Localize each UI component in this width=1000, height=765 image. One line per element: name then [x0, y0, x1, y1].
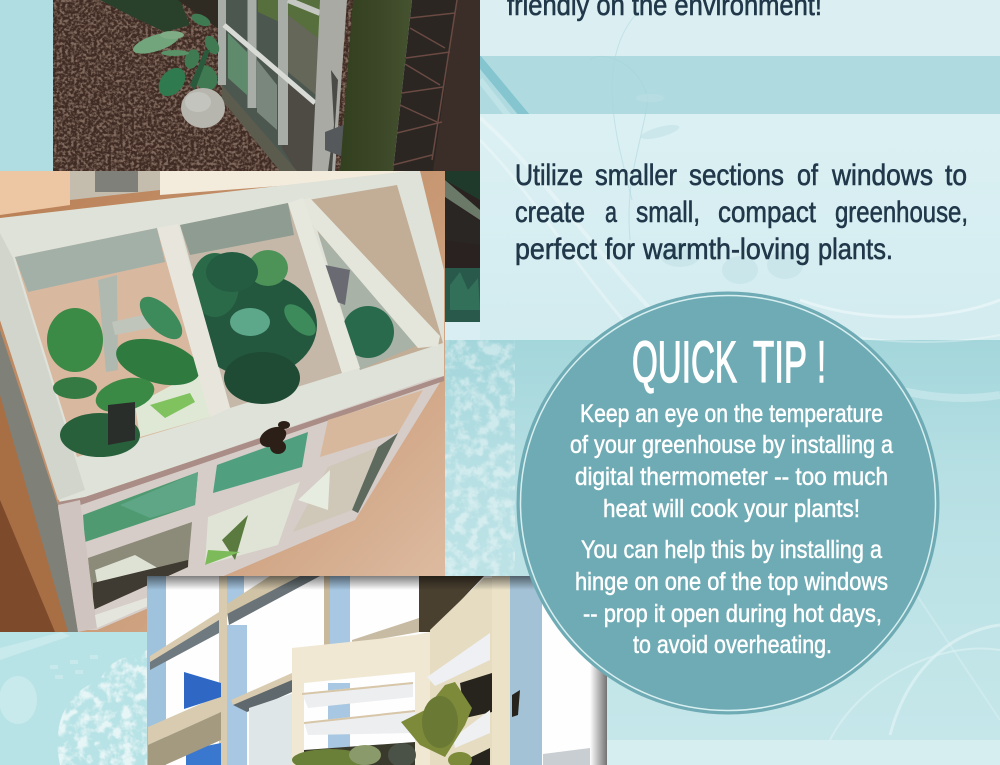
left side of greenhouse [0, 330, 78, 632]
pane left [15, 228, 210, 457]
decorative streaks [480, 10, 1000, 740]
bottom light panel [607, 740, 1000, 765]
leaves [47, 290, 205, 457]
stone [181, 88, 225, 128]
text: utilize smaller sections: Utilize [515, 159, 583, 192]
text: utilize smaller sections: of [797, 159, 819, 192]
callout body text: of your greenhouse by installing a [570, 431, 893, 459]
photo: garden window greenhouse [53, 0, 480, 171]
text: utilize smaller sections: warmth-loving [642, 233, 810, 266]
front frame [58, 376, 444, 630]
text: utilize smaller sections: a [605, 196, 617, 229]
callout body text: digital thermometer -- too much [575, 463, 888, 491]
roof frame [0, 171, 444, 503]
callout body text: hinge on one of the top windows [575, 568, 888, 596]
callout heading: ! [817, 330, 826, 395]
callout body text: to avoid overheating. [633, 631, 832, 659]
hosta plant [133, 14, 220, 96]
photo: strip behind terrarium [445, 171, 480, 322]
text: utilize smaller sections: create [515, 196, 585, 229]
photo: indoor vertical garden greenhouse [147, 576, 607, 765]
photo vignette [147, 576, 534, 589]
soil [53, 0, 353, 171]
planter unit [292, 576, 520, 765]
text: utilize smaller sections [515, 159, 968, 266]
callout: quick tip circle [516, 292, 940, 714]
text: utilize smaller sections: for [605, 233, 635, 266]
front panes [83, 390, 423, 610]
callout heading: QUICK [632, 330, 737, 395]
outdoor view [148, 672, 294, 765]
lower left post [58, 500, 97, 632]
dark wall [419, 576, 484, 632]
window greenhouse [220, 0, 347, 171]
callout body text: -- prop it open during hot days, [583, 600, 882, 628]
wood floor [0, 171, 445, 632]
text: utilize smaller sections: smaller [595, 159, 677, 192]
callout body text: Keep an eye on the temperature [580, 400, 883, 428]
diagonal beams [148, 576, 419, 745]
photo: miniature window greenhouse [0, 171, 445, 632]
callout body text [570, 400, 893, 659]
mullion [157, 224, 230, 417]
foliage texture [445, 340, 515, 576]
pane middle [180, 203, 342, 408]
callout body text: heat will cook your plants! [603, 495, 860, 523]
lower teal panel [445, 340, 1000, 740]
latch [257, 421, 290, 454]
left strip [0, 0, 53, 171]
callout heading: TIP [753, 330, 807, 395]
top light panel [480, 0, 1000, 56]
wall behind [70, 171, 160, 200]
text: utilize smaller sections: greenhouse, [835, 196, 968, 229]
bottom rim of greenhouse [95, 598, 147, 628]
text: utilize smaller sections: plants. [818, 233, 893, 266]
decorative flowers [636, 94, 803, 284]
window columns [147, 576, 542, 765]
succulents [292, 682, 472, 765]
text: utilize smaller sections: windows [831, 159, 933, 192]
pane right [288, 185, 443, 373]
callout body text: You can help this by installing a [581, 536, 882, 564]
text: utilize smaller sections: perfect [515, 233, 598, 266]
band streak [480, 56, 529, 114]
trellis [393, 0, 480, 171]
text: utilize smaller sections: sections [689, 159, 784, 192]
bottom-left teal panel [0, 632, 147, 765]
text: utilize smaller sections: compact [718, 196, 817, 229]
wooden post [340, 0, 412, 171]
text: utilize smaller sections: to [945, 159, 967, 192]
hinge [325, 125, 344, 156]
middle light panel [480, 114, 1000, 340]
teal band [480, 56, 1000, 114]
text: utilize smaller sections: small, [636, 196, 700, 229]
